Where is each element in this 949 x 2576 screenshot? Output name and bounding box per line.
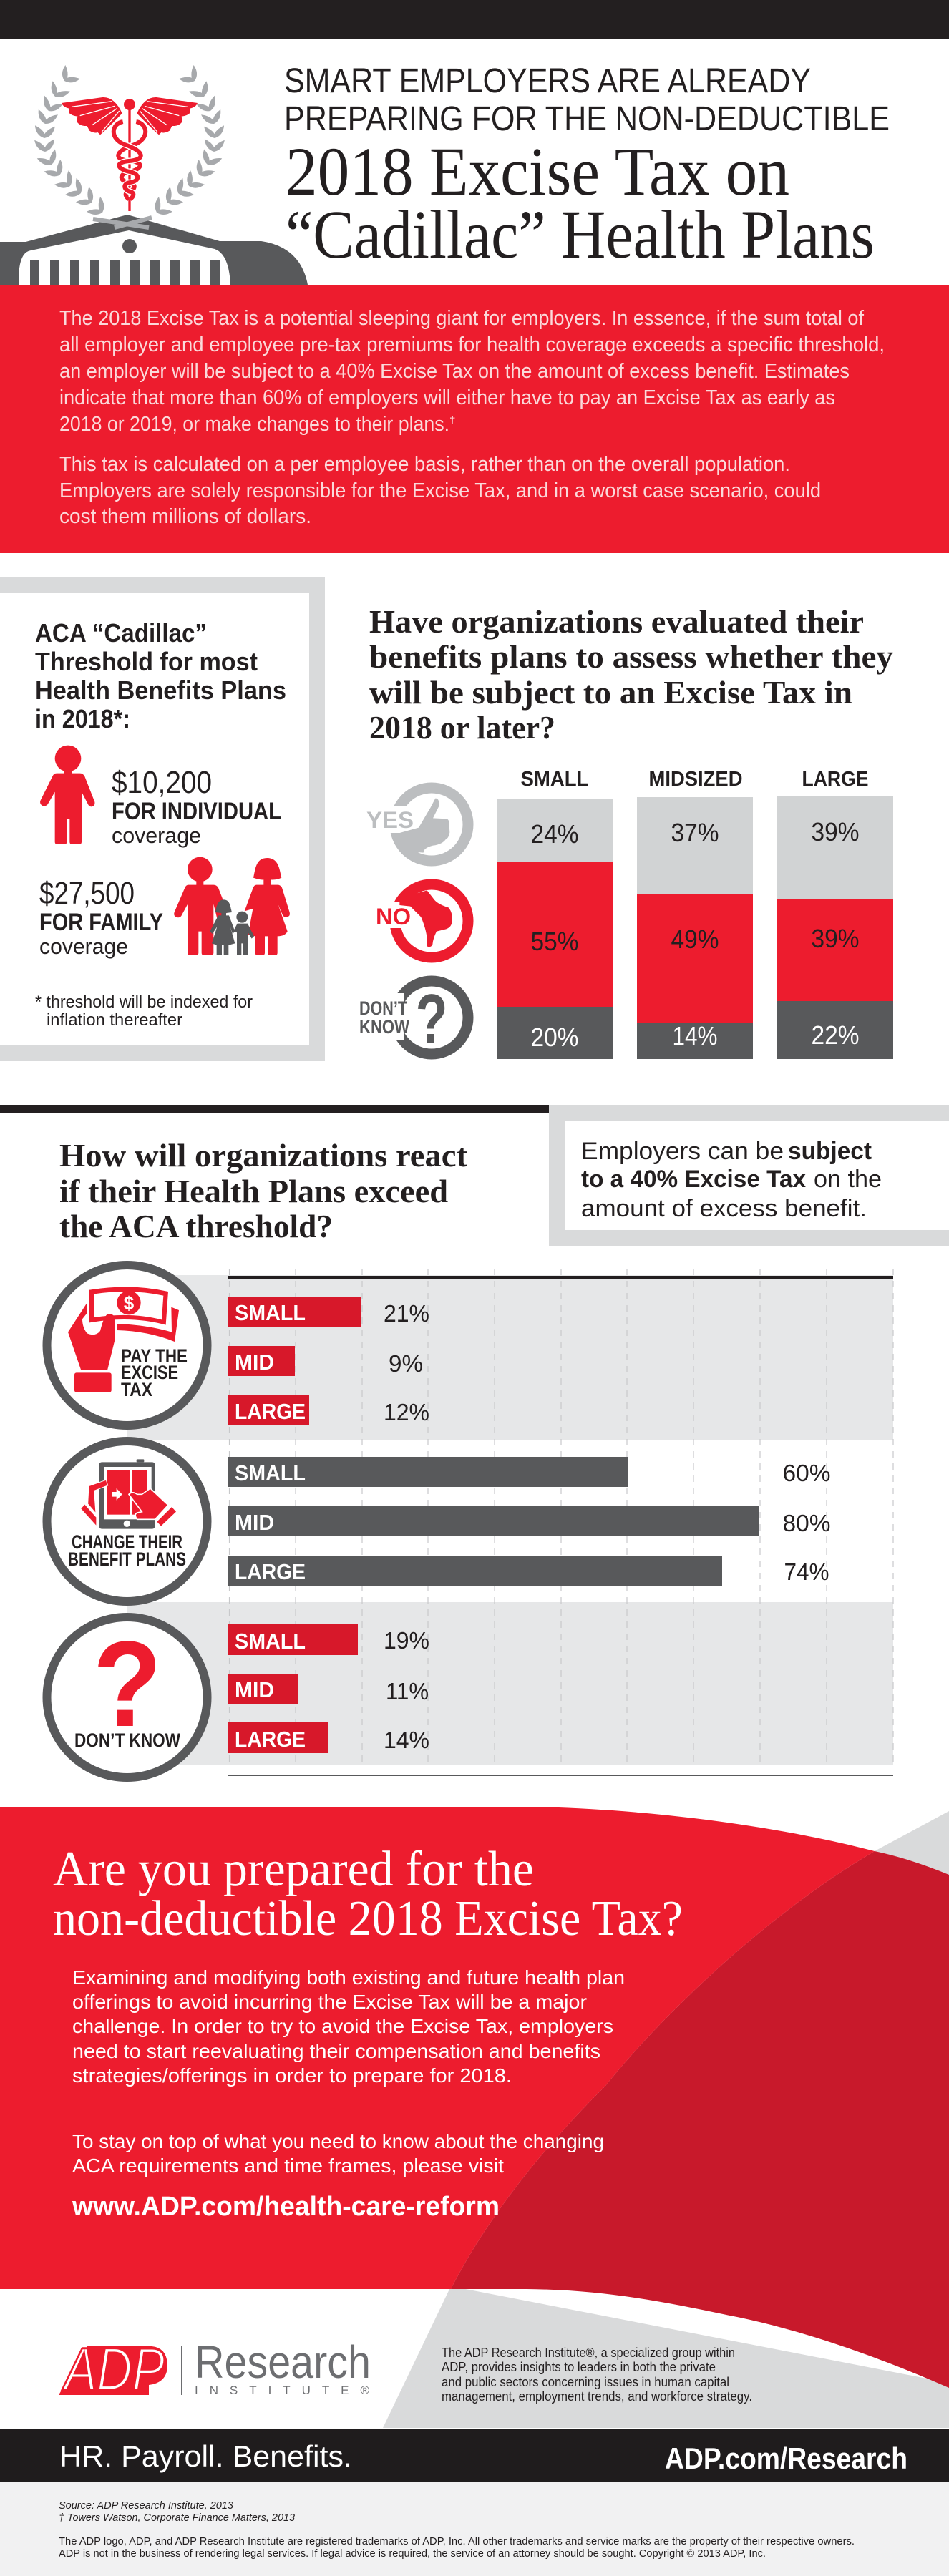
icon: yes thumbs up (366, 788, 468, 861)
bars: change their benefit plans (228, 1457, 830, 1586)
icon: yes thumbs up: YES (366, 807, 414, 833)
logo: ADP Research Institute: Research (195, 2336, 371, 2388)
call to action body text (72, 1966, 625, 2177)
title kicker line 1: SMART EMPLOYERS ARE ALREADY (284, 62, 811, 100)
title line 4: “Cadillac” Health Plans (286, 196, 875, 273)
family threshold text: FOR FAMILY (39, 909, 163, 936)
family threshold text (39, 876, 163, 959)
bars: don't know: MID (235, 1677, 274, 1702)
icon: building (0, 215, 308, 285)
icon: don't know question (359, 980, 468, 1058)
about ADP Research Institute text: ADP, provides insights to leaders in both the private (442, 2360, 716, 2374)
bars: change their benefit plans: 74% (784, 1558, 829, 1585)
heading: how will organizations react: How will organizations react (59, 1137, 468, 1174)
threshold heading (35, 618, 286, 733)
heading: have organizations evaluated: 2018 or later? (369, 709, 555, 746)
call to action body text: Examining and modifying both existing and future health plan (72, 1966, 625, 1989)
icon: no thumbs down: NO (376, 904, 411, 930)
individual threshold text: coverage (112, 823, 201, 848)
bars: don't know: 14% (384, 1727, 429, 1753)
column: small: 20% (531, 1023, 578, 1052)
icon: family (174, 857, 290, 955)
call to action body text: To stay on top of what you need to know about the changing (72, 2130, 604, 2152)
intro paragraph text (59, 307, 885, 528)
bars: change their benefit plans: SMALL (235, 1460, 306, 1485)
footer legal panel (0, 2482, 949, 2576)
sources: Source: ADP Research Institute, 2013 (59, 2500, 233, 2512)
bars: change their benefit plans: 80% (783, 1510, 830, 1536)
horizontal bar chart: reactions (127, 1269, 893, 1776)
individual threshold text: FOR INDIVIDUAL (112, 798, 281, 825)
about ADP Research Institute text: The ADP Research Institute®, a specialized group within (442, 2346, 735, 2360)
family threshold text: coverage (39, 934, 128, 959)
column: midsized: MIDSIZED (648, 768, 743, 791)
column: midsized: 14% (673, 1021, 717, 1050)
icon: pay the excise tax (47, 1265, 208, 1425)
icon: don't know circle: DON’T KNOW (74, 1729, 180, 1751)
column: small: 24% (531, 819, 578, 849)
icon: pay the excise tax: EXCISE (121, 1362, 178, 1383)
heading: how will organizations react: if their Health Plans exceed (59, 1173, 448, 1209)
callout: 40% excise tax: subject (788, 1138, 872, 1165)
column: large: 39% (812, 817, 859, 847)
heading: have organizations evaluated: will be subject to an Excise Tax in (369, 674, 852, 711)
intro paragraph text: Employers are solely responsible for the Excise Tax, and in a worst case scenario, could (59, 479, 821, 502)
intro paragraph text: cost them millions of dollars. (59, 505, 311, 528)
individual threshold text: $10,200 (112, 765, 212, 800)
panel: ACA threshold (0, 577, 325, 1061)
about ADP Research Institute text (442, 2346, 752, 2404)
column: large: 39% (812, 924, 859, 953)
intro paragraph text: all employer and employee pre-tax premiums for health coverage exceeds a specific threshold, (59, 333, 885, 356)
threshold footnote: * threshold will be indexed for (35, 992, 253, 1012)
icon: don't know circle (47, 1616, 208, 1777)
column: large: LARGE (802, 768, 869, 791)
threshold heading: Health Benefits Plans (35, 675, 286, 705)
bars: pay the excise tax: 21% (384, 1300, 429, 1327)
individual threshold text (112, 765, 281, 848)
bars: pay the excise tax (228, 1297, 429, 1425)
heading: have organizations evaluated: benefits plans to assess whether they (369, 638, 893, 675)
stacked bar chart (497, 768, 893, 1059)
title line 3: 2018 Excise Tax on (286, 133, 789, 210)
call to action body text: offerings to avoid incurring the Excise Tax will be a major (72, 1991, 587, 2013)
icon: don't know question: ? (415, 980, 448, 1058)
call to action body text: need to start reevaluating their compensation and benefits (72, 2040, 600, 2062)
logo: ADP Research Institute (59, 2336, 371, 2403)
column: small (497, 768, 613, 1059)
bars: pay the excise tax: MID (235, 1350, 274, 1375)
callout: 40% excise tax: amount of excess benefit. (581, 1195, 867, 1222)
bars: don't know: SMALL (235, 1629, 306, 1654)
legal text: The ADP logo, ADP, and ADP Research Institute are registered trademarks of ADP, Inc. All other trademarks and service marks are the property of their respective owners. (59, 2536, 855, 2547)
callout: 40% excise tax: to a 40% Excise Tax (581, 1166, 806, 1193)
title block (284, 62, 890, 273)
call to action body text: challenge. In order to try to avoid the Excise Tax, employers (72, 2015, 613, 2037)
icon: individual person (40, 746, 94, 844)
bars: pay the excise tax: SMALL (235, 1300, 306, 1325)
callout: 40% excise tax (549, 1105, 949, 1246)
legal text (59, 2536, 855, 2560)
icon: don't know question: KNOW (359, 1016, 409, 1038)
bars: don't know: 19% (384, 1627, 429, 1654)
about ADP Research Institute text: management, employment trends, and workforce strategy. (442, 2389, 752, 2404)
icon: change their benefit plans: BENEFIT PLANS (68, 1548, 186, 1570)
threshold heading: Threshold for most (35, 647, 258, 676)
bars: don't know: 11% (386, 1678, 429, 1704)
heading: how will organizations react: the ACA threshold? (59, 1208, 333, 1244)
column: small: SMALL (521, 768, 588, 791)
intro paragraph text: an employer will be subject to a 40% Excise Tax on the amount of excess benefit. Estimates (59, 360, 850, 383)
column: midsized (637, 768, 753, 1059)
column: small: 55% (531, 927, 578, 956)
threshold footnote: inflation thereafter (47, 1010, 182, 1030)
panel: intro (0, 285, 949, 553)
bars: change their benefit plans: LARGE (235, 1559, 306, 1584)
callout: 40% excise tax: on the (814, 1166, 882, 1193)
header icon: caduceus, laurel and building (0, 65, 308, 285)
call to action heading (53, 1842, 683, 1946)
bars: don't know (228, 1624, 429, 1753)
bars: pay the excise tax: 9% (389, 1350, 423, 1377)
intro paragraph text: This tax is calculated on a per employee basis, rather than on the overall population. (59, 453, 790, 476)
tagline: HR. Payroll. Benefits. (59, 2439, 352, 2473)
intro paragraph text: 2018 or 2019, or make changes to their plans. (59, 413, 449, 436)
icon: change their benefit plans: CHANGE THEIR (72, 1531, 182, 1553)
black footer band (0, 2429, 949, 2482)
icon: caduceus (62, 97, 198, 211)
panel: call to action background (0, 1807, 949, 2428)
sources: † Towers Watson, Corporate Finance Matters, 2013 (59, 2512, 295, 2524)
bars: change their benefit plans: 60% (783, 1460, 830, 1486)
about ADP Research Institute text: and public sectors concerning issues in human capital (442, 2375, 729, 2389)
legal text: ADP is not in the business of rendering legal services. If legal advice is required, the service of an attorney should be sought. Copyright © 2013 ADP, Inc. (59, 2548, 766, 2560)
bars: change their benefit plans: MID (235, 1510, 274, 1535)
title kicker line 2: PREPARING FOR THE NON-DEDUCTIBLE (284, 100, 890, 138)
icon: no thumbs down (376, 884, 468, 957)
call to action heading: Are you prepared for the (53, 1842, 534, 1897)
heading: how will organizations react (59, 1137, 468, 1244)
call to action body text: strategies/offerings in order to prepare for 2018. (72, 2064, 512, 2087)
icon: pay the excise tax: TAX (121, 1379, 152, 1400)
call to action body text: ACA requirements and time frames, please visit (72, 2155, 504, 2177)
heading: have organizations evaluated: Have organizations evaluated their (369, 603, 864, 640)
column: midsized: 49% (671, 924, 719, 954)
intro paragraph text: † (449, 414, 455, 426)
footer url: ADP.com/Research (665, 2441, 907, 2475)
family threshold text: $27,500 (39, 876, 135, 911)
intro paragraph text: indicate that more than 60% of employers will either have to pay an Excise Tax as early as (59, 386, 835, 409)
heading: have organizations evaluated (369, 603, 893, 746)
call to action heading: non-deductible 2018 Excise Tax? (53, 1891, 683, 1946)
callout: 40% excise tax: Employers can be (581, 1138, 784, 1165)
icon: laurel wreath (34, 65, 225, 220)
logo: ADP Research Institute: ADP (62, 2336, 165, 2403)
threshold heading: in 2018*: (35, 704, 130, 733)
column: large: 22% (812, 1020, 859, 1050)
bars: don't know: LARGE (235, 1727, 306, 1752)
call to action url: www.ADP.com/health-care-reform (72, 2192, 500, 2222)
logo: ADP Research Institute: INSTITUTE® (195, 2384, 369, 2397)
bars: pay the excise tax: LARGE (235, 1399, 306, 1424)
icon: don't know question: DON’T (359, 997, 407, 1019)
sources (59, 2500, 295, 2524)
column: large (777, 768, 893, 1059)
top black bar (0, 0, 949, 39)
icon: pay the excise tax: $ (124, 1292, 135, 1314)
column: midsized: 37% (671, 818, 719, 847)
intro paragraph text: The 2018 Excise Tax is a potential sleeping giant for employers. In essence, if the sum total of (59, 307, 865, 330)
icon: don't know circle: ? (93, 1616, 162, 1752)
threshold footnote (35, 992, 253, 1030)
icon: change their benefit plans (47, 1441, 208, 1601)
bars: pay the excise tax: 12% (384, 1399, 429, 1425)
icon: pay the excise tax: PAY THE (121, 1345, 188, 1367)
threshold heading: ACA “Cadillac” (35, 618, 207, 648)
